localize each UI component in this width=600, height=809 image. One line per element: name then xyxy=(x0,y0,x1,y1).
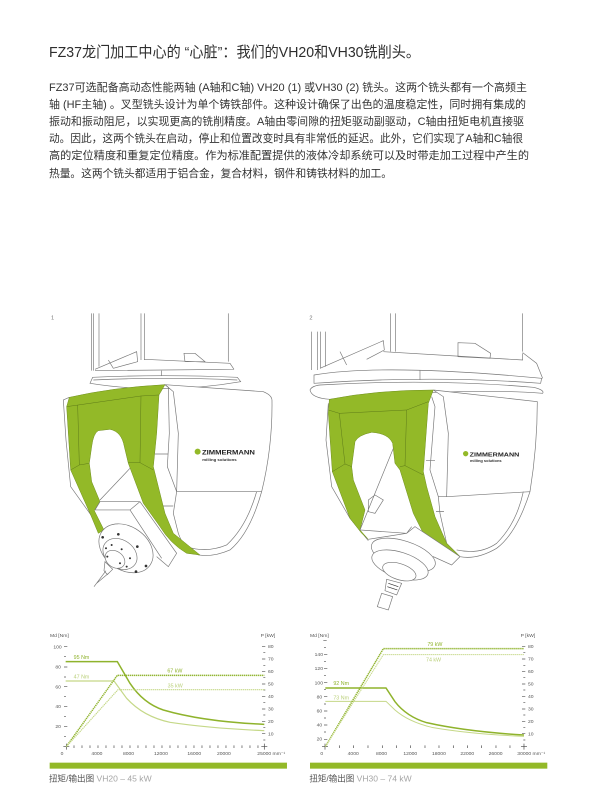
spindle face xyxy=(90,514,162,583)
y axis labels left xyxy=(310,633,329,743)
y axis labels left: 20 xyxy=(317,737,322,743)
text block: introduction: 高的定位精度和重复定位精度。作为标准配置提供的液体冷却系统可以及时带走加工过程中产生的 xyxy=(49,148,529,162)
mounting columns xyxy=(92,313,228,371)
y axis labels right: 10 xyxy=(528,731,534,737)
y axis labels right: 30 xyxy=(528,707,534,713)
y axis labels right: 20 xyxy=(268,719,274,725)
logo: Zimmermann: milling solutions xyxy=(202,457,237,462)
x axis labels: 30000 mm⁻¹ xyxy=(517,751,545,757)
x axis labels: 4000 xyxy=(348,751,359,757)
text block: introduction xyxy=(49,80,529,180)
curve labels: 35 kW xyxy=(168,683,184,689)
curve labels xyxy=(74,655,184,689)
chart: VH20 torque and power xyxy=(49,633,287,783)
text block: introduction: 轴 (HF主轴) 。叉型铣头设计为单个铸铁部件。这种设计确保了出色的温度稳定性，同时拥有集成的 xyxy=(49,97,526,111)
chart: VH30 torque and power xyxy=(309,633,547,783)
axes ticks xyxy=(323,640,525,740)
x axis labels: 0 xyxy=(61,751,64,757)
y axis labels right: P [kW] xyxy=(521,633,536,639)
mounting brackets xyxy=(320,341,543,378)
fork casting edges xyxy=(67,395,159,470)
chart caption: 扭矩/输出图 VH30 – 74 kW xyxy=(309,773,412,783)
head housing outline xyxy=(63,385,272,556)
mounting columns xyxy=(312,313,523,370)
illustration: VH20 milling head xyxy=(51,313,272,587)
inner fork and spindle block xyxy=(360,448,412,533)
curve labels: 47 Nm xyxy=(74,674,90,680)
y axis labels right: 10 xyxy=(268,731,274,737)
axes ticks xyxy=(64,647,265,740)
x axis labels: 22000 xyxy=(460,751,474,757)
mounting brackets xyxy=(95,352,234,371)
y axis labels right xyxy=(261,633,276,737)
y axis labels left: Md [Nm] xyxy=(310,633,329,639)
curve labels: 73 Nm xyxy=(333,695,350,701)
y axis labels right: P [kW] xyxy=(261,633,276,639)
illustration: VH30 milling head xyxy=(309,313,543,610)
curve labels: 67 kW xyxy=(167,668,183,674)
y axis labels left: Md [Nm] xyxy=(50,633,69,639)
flange xyxy=(90,376,241,389)
curve labels: 74 kW xyxy=(426,657,442,663)
green rule xyxy=(310,763,547,769)
y axis labels left: 60 xyxy=(317,709,322,715)
y axis labels left: 100 xyxy=(315,680,323,686)
y axis labels left: 20 xyxy=(55,724,61,730)
spindle body xyxy=(367,531,439,579)
y axis labels right: 80 xyxy=(268,644,274,650)
spindle housing xyxy=(368,527,460,573)
y axis labels right: 60 xyxy=(268,669,274,675)
x axis labels xyxy=(320,751,545,757)
y axis labels left: 80 xyxy=(317,694,322,700)
power curves xyxy=(66,675,264,747)
bolts xyxy=(101,533,147,573)
logo: Zimmermann: milling solutions xyxy=(470,459,502,463)
y axis labels left: 40 xyxy=(55,704,61,710)
spindle housing xyxy=(95,502,177,567)
x axis labels: 25000 mm⁻¹ xyxy=(257,751,285,757)
tool xyxy=(94,562,113,587)
text block: introduction: 热量。这两个铣头都适用于铝合金，复合材料，钢件和铸铁材料的加工。 xyxy=(49,166,392,180)
y axis labels right: 50 xyxy=(268,682,274,688)
fork casting edges xyxy=(328,402,428,475)
curve labels xyxy=(333,642,443,701)
green fork casting xyxy=(67,385,200,555)
y axis labels left: 80 xyxy=(55,665,61,671)
text block: introduction: 动。因此，这两个铣头在启动，停止和位置改变时具有非常低的延迟。此外，它们实现了A轴和C轴很 xyxy=(49,131,523,145)
x axis labels: 16000 xyxy=(187,751,201,757)
chart caption: 扭矩/输出图 VH20 – 45 kW xyxy=(49,773,152,783)
x axis labels: 8000 xyxy=(376,751,387,757)
y axis labels right: 70 xyxy=(528,657,534,663)
text block: introduction: 振动和振动阻尼，以实现更高的铣削精度。A轴由零间隙的扭矩驱动副驱动，C轴由扭矩电机直接驱 xyxy=(49,114,524,128)
x axis labels: 18000 xyxy=(432,751,446,757)
curve labels: 95 Nm xyxy=(74,655,90,661)
y axis labels right: 50 xyxy=(528,682,534,688)
y axis labels right: 40 xyxy=(268,694,274,700)
head housing outline xyxy=(326,390,537,557)
logo: Zimmermann xyxy=(195,449,255,462)
y axis labels left: 100 xyxy=(53,644,62,650)
x axis labels: 12000 xyxy=(154,751,168,757)
logo: Zimmermann: ZIMMERMANN xyxy=(202,450,255,457)
power curves xyxy=(325,649,524,747)
y axis labels right: 20 xyxy=(528,719,534,725)
x axis labels: 26000 xyxy=(489,751,503,757)
y axis labels left: 120 xyxy=(315,666,323,672)
title: FZ37龙门加工中心的 “心脏”：我们的VH20和VH30铣削头。 xyxy=(49,44,420,61)
green rule xyxy=(50,763,287,769)
flange xyxy=(314,370,542,383)
y axis labels right: 60 xyxy=(528,669,534,675)
curve labels: 79 kW xyxy=(427,642,443,648)
x axis labels: 8000 xyxy=(123,751,134,757)
x axis labels xyxy=(61,751,285,757)
x axis labels: 0 xyxy=(320,751,323,757)
y axis labels right: 40 xyxy=(528,694,534,700)
tool holder xyxy=(377,579,402,610)
y axis labels right: 80 xyxy=(528,644,534,650)
x axis labels: 4000 xyxy=(91,751,103,757)
green fork casting xyxy=(328,390,460,557)
label: number 2: 2 xyxy=(309,315,312,321)
torque curves xyxy=(66,662,264,724)
y axis labels right: 30 xyxy=(268,707,274,713)
y axis labels right: 70 xyxy=(268,657,274,663)
torque curves xyxy=(325,688,524,735)
label: number 1: 1 xyxy=(51,315,54,321)
x axis labels: 12000 xyxy=(403,751,417,757)
y axis labels left: 40 xyxy=(317,723,322,729)
y axis labels right xyxy=(521,633,536,737)
logo: Zimmermann xyxy=(463,451,519,463)
inner fork line xyxy=(100,468,130,500)
logo: Zimmermann: ZIMMERMANN xyxy=(470,452,519,458)
text block: introduction: FZ37可选配备高动态性能两轴 (A轴和C轴) VH20 (1) 或VH30 (2) 铣头。这两个铣头都有一个高频主 xyxy=(49,80,527,94)
y axis labels left: 140 xyxy=(315,652,323,658)
y axis labels left: 60 xyxy=(55,684,61,690)
x axis labels: 20000 xyxy=(217,751,231,757)
curve labels: 92 Nm xyxy=(333,681,350,687)
y axis labels left xyxy=(50,633,69,730)
